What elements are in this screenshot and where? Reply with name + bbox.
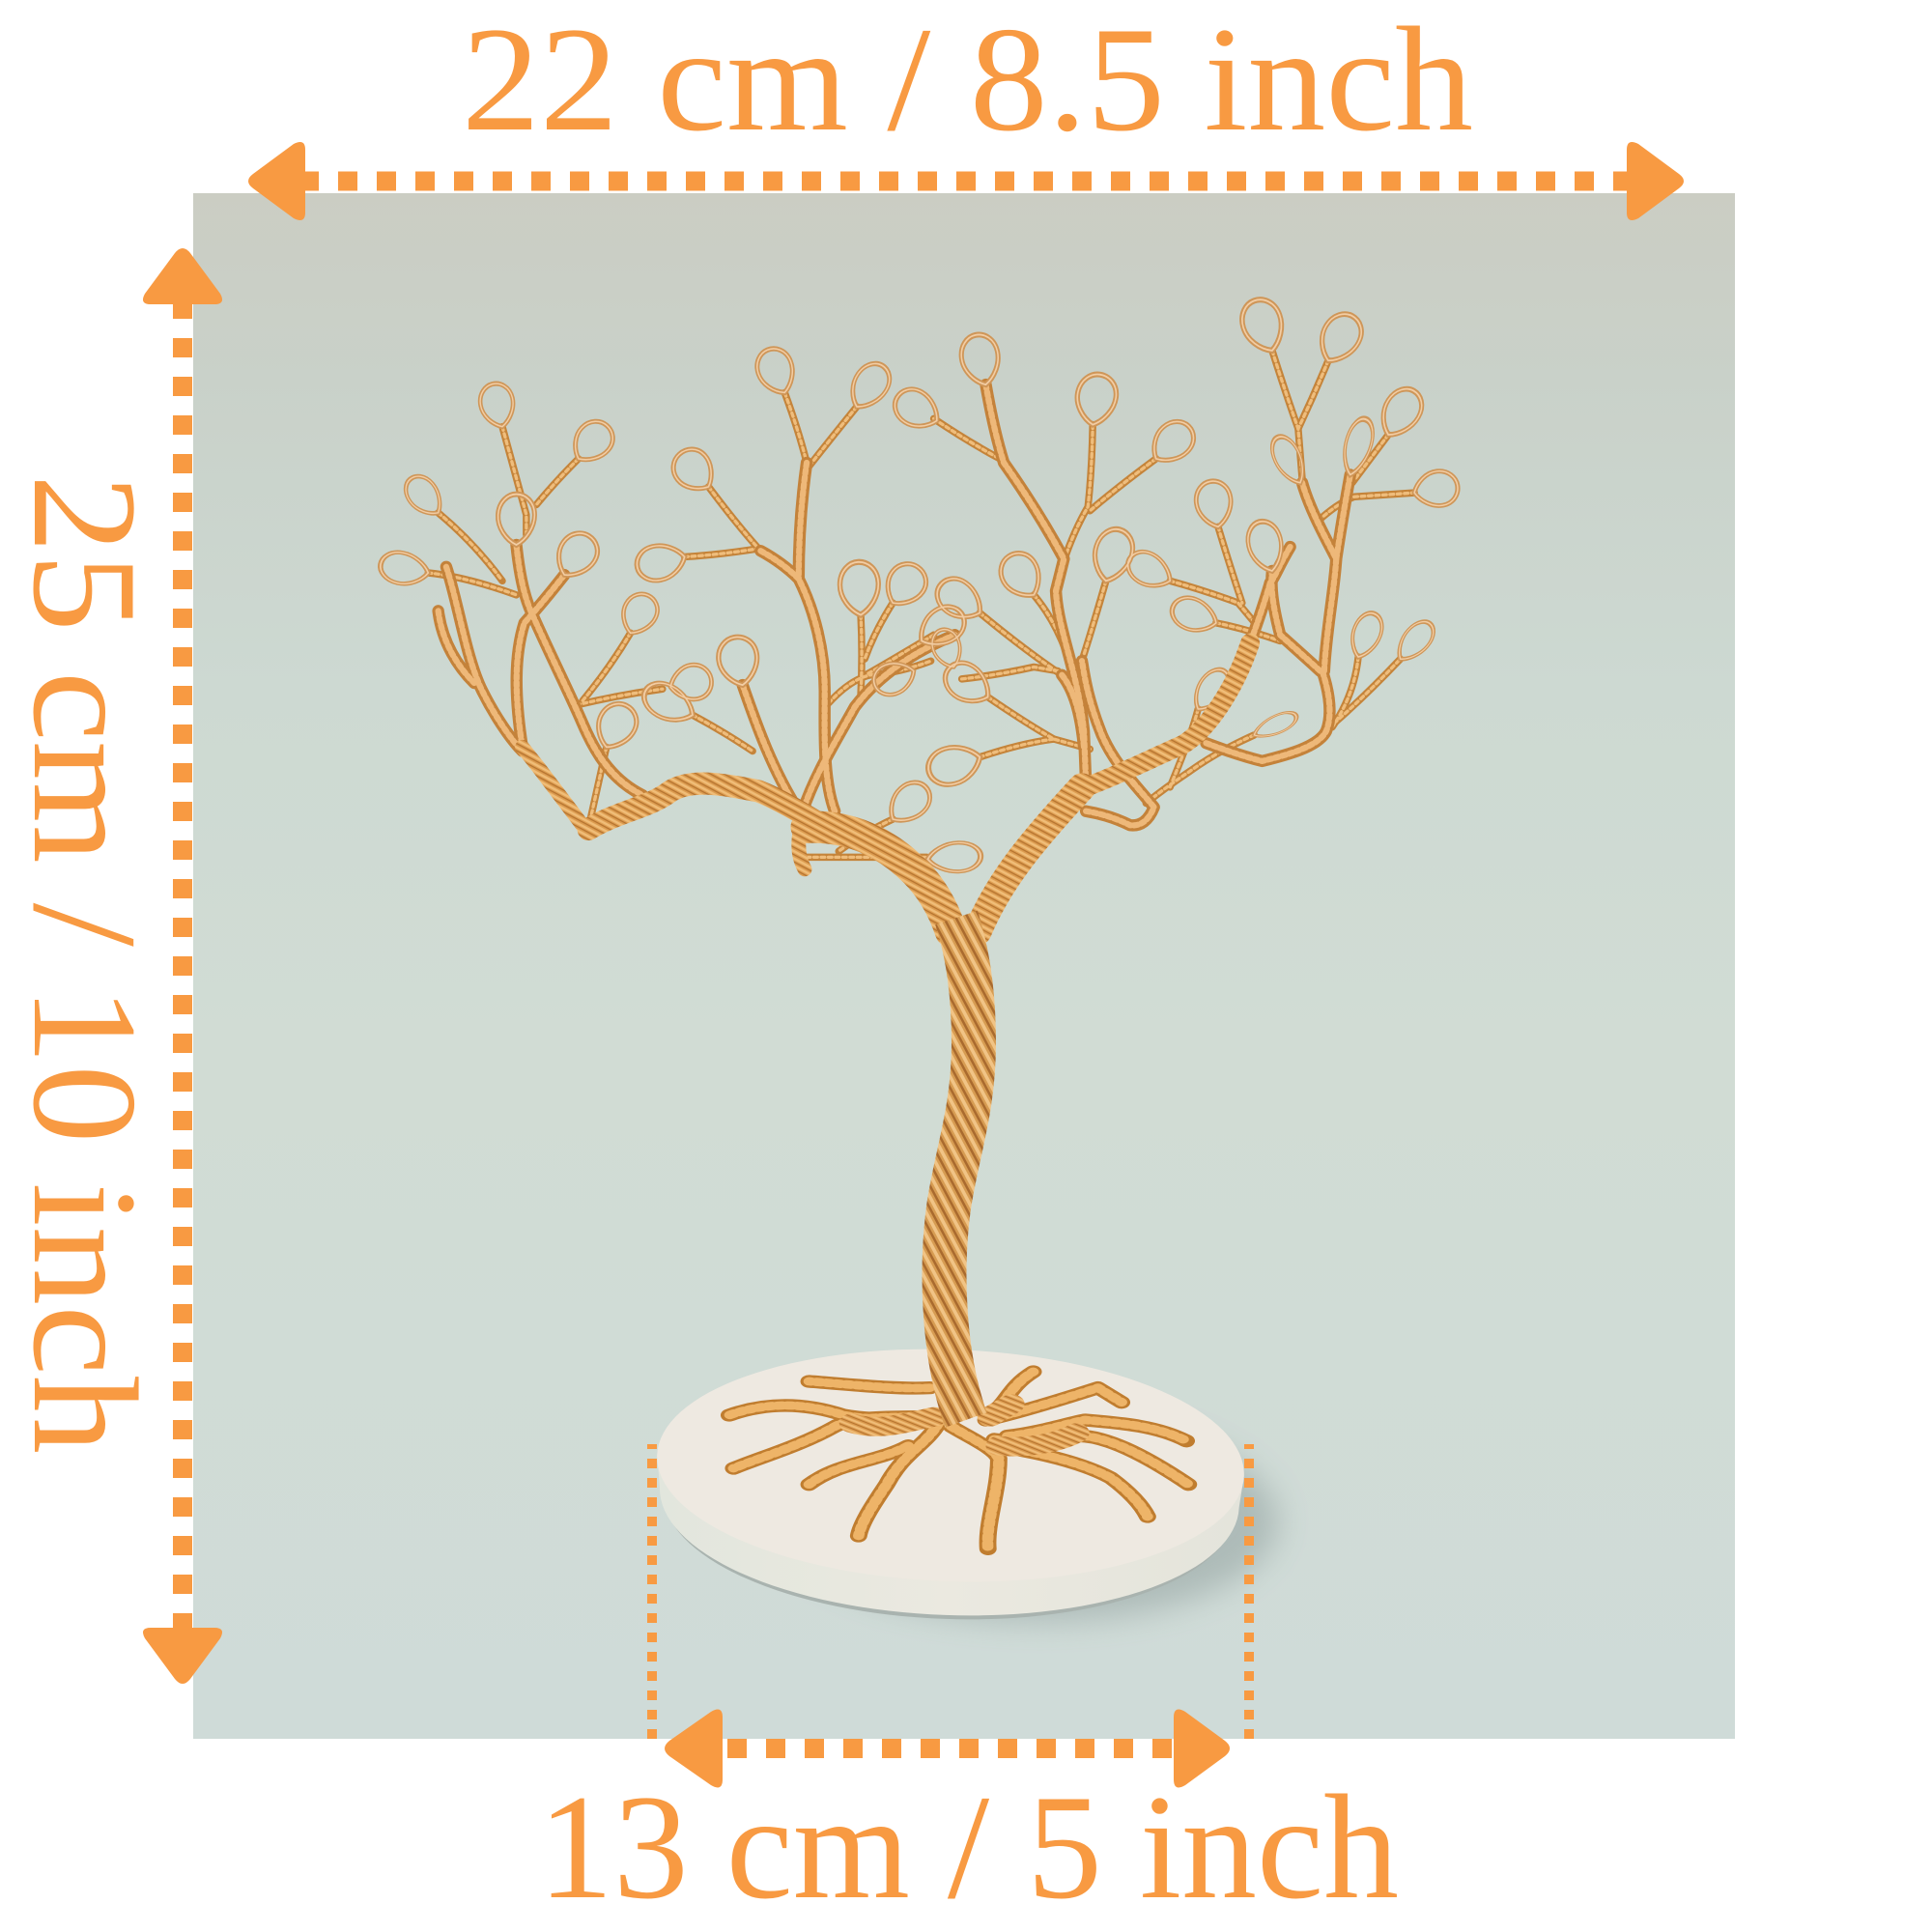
twisted trunk <box>945 918 974 1420</box>
wire loops at branch tips <box>378 295 1461 873</box>
left height arrow <box>143 248 222 1684</box>
base width dotted guides <box>652 1444 1249 1739</box>
top width arrow <box>248 142 1684 220</box>
base width arrow <box>665 1710 1230 1787</box>
label: overall height: 25 cm / 10 inch <box>2 474 168 1454</box>
copper wire roots <box>729 1372 1188 1548</box>
photo background panel <box>193 193 1735 1739</box>
thin wire branches and twigs <box>428 351 1414 857</box>
main limbs <box>523 643 1250 931</box>
label: base width: 13 cm / 5 inch <box>538 1764 1399 1930</box>
label: overall width: 22 cm / 8.5 inch <box>462 0 1473 162</box>
white round base <box>652 1339 1284 1631</box>
